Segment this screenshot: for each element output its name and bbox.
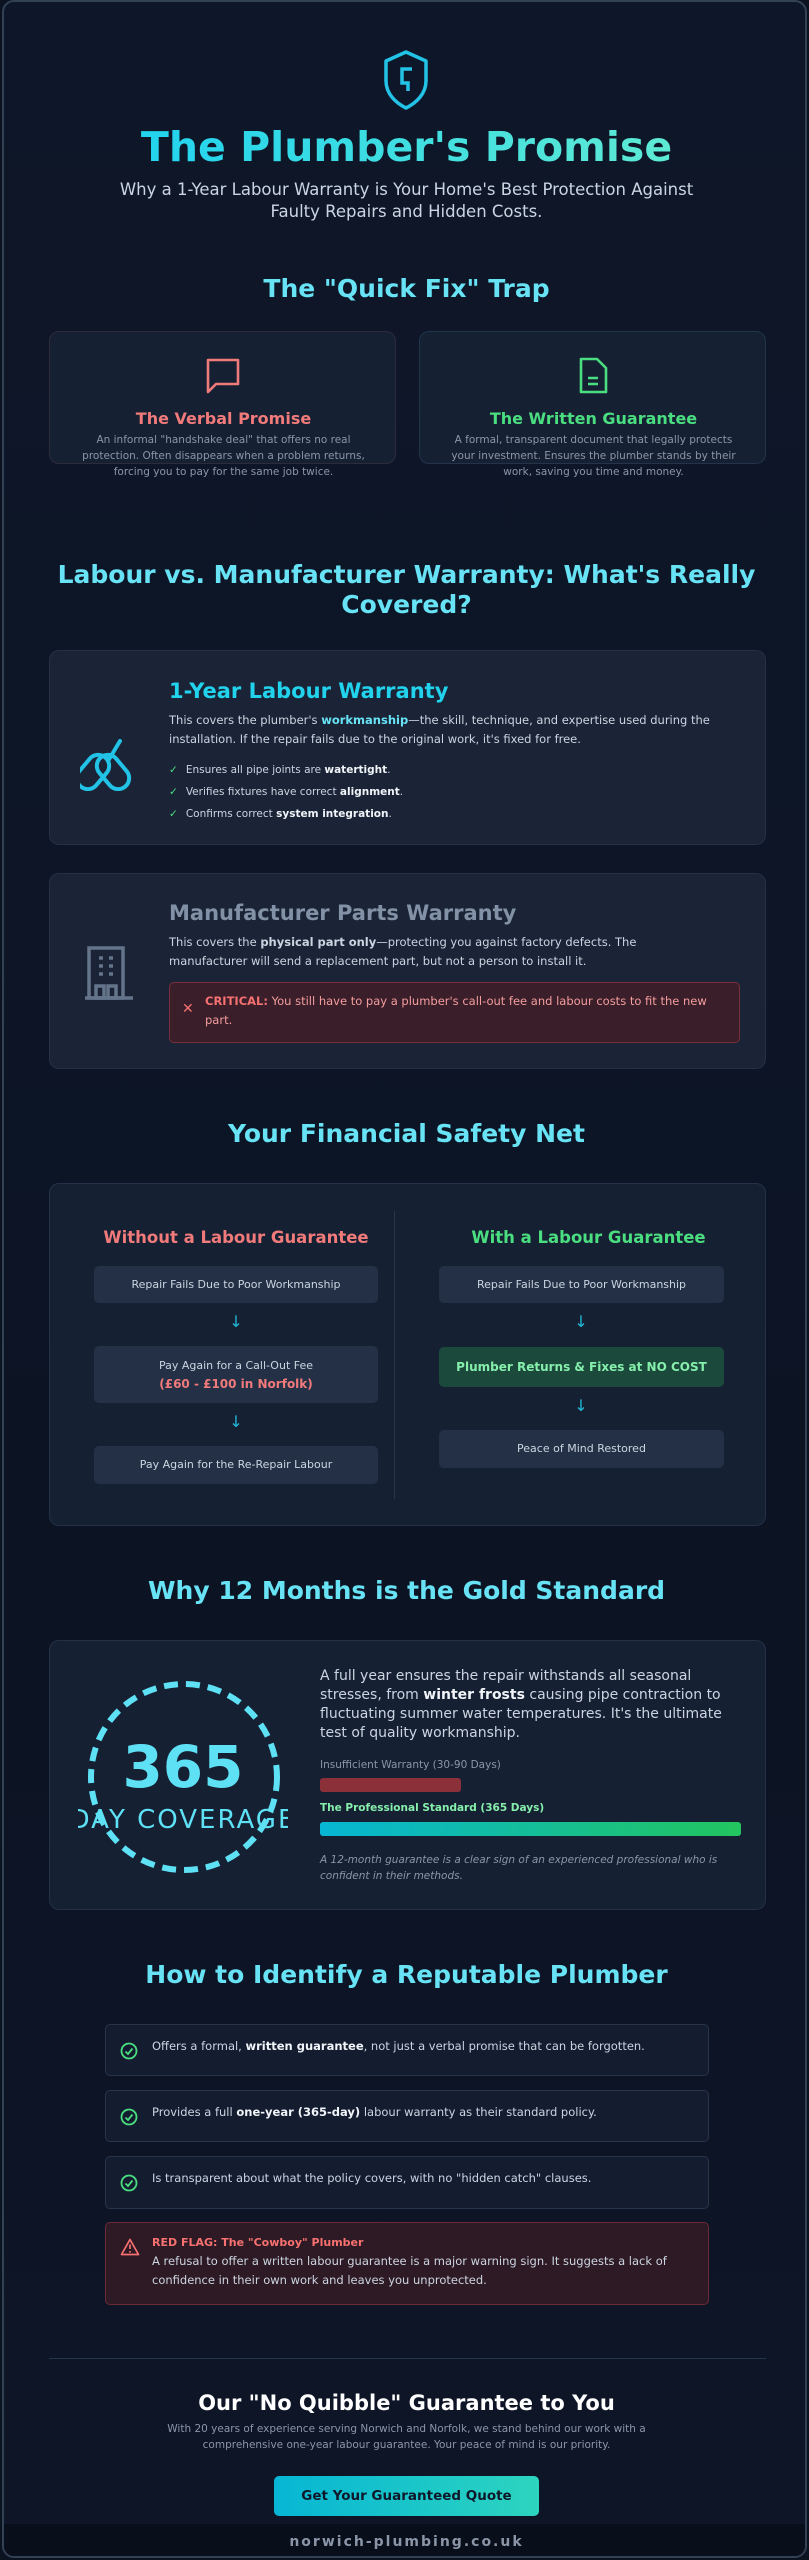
icon: building [85, 946, 133, 1000]
note: A 12-month guarantee is a clear sign of an experienced professional who is confident in their methods. [320, 1854, 717, 1882]
heading: reputable plumber: How to Identify a Reputable Plumber [145, 1960, 668, 1989]
checklist item 3 [105, 2156, 709, 2209]
button: get quote [274, 2476, 539, 2516]
column: without guarantee: Pay Again for the Re-Repair Labour [140, 1458, 332, 1471]
card title: The Verbal Promise [136, 409, 311, 428]
callout: critical [169, 982, 740, 1043]
column: without guarantee: Without a Labour Guarantee [103, 1228, 369, 1247]
heading: financial safety net: Your Financial Safety Net [228, 1119, 585, 1148]
icon: shield [384, 50, 428, 110]
bar chart [320, 1759, 741, 1836]
checklist: ✓ Confirms correct system integration. [169, 808, 392, 820]
checklist item 1: Offers a formal, written guarantee, not just a verbal promise that can be forgotten. [152, 2039, 645, 2053]
checklist: ✓ Ensures all pipe joints are watertight. [169, 764, 390, 776]
callout: red flag: RED FLAG: The "Cowboy" Plumber [152, 2236, 363, 2249]
column: without guarantee: (£60 - £100 in Norfolk) [159, 1376, 313, 1390]
icon: speech bubble [206, 358, 240, 394]
card text: This covers the plumber's workmanship—the skill, technique, and expertise used during the installation. If the repair fails due to the original work, it's fixed for free. [169, 713, 710, 746]
checklist item 3: Is transparent about what the policy covers, with no "hidden catch" clauses. [152, 2171, 591, 2185]
panel: financial comparison [49, 1183, 766, 1526]
card title: The Written Guarantee [490, 409, 697, 428]
card text: This covers the physical part only—protecting you against factory defects. The manufacturer will send a replacement part, but not a person to install it. [169, 935, 636, 968]
icon: document [580, 358, 608, 394]
icon: link [80, 739, 132, 791]
chart: 365 circle: 365 [122, 1733, 244, 1801]
column: without guarantee [94, 1228, 378, 1484]
column: with guarantee [439, 1228, 724, 1468]
chart: 365 circle [78, 1681, 288, 1873]
panel: verbal promise [49, 331, 396, 464]
text block: A full year ensures the repair withstands all seasonal stresses, from winter frosts causing pipe contraction to fluctuating summer water temperatures. It's the ultimate test of quality workmanship. [320, 1668, 722, 1741]
column: without guarantee: ↓ [229, 1412, 243, 1431]
column: without guarantee: Pay Again for a Call-Out Fee [159, 1358, 313, 1372]
title: The Plumber's Promise [141, 123, 672, 171]
panel: 365 day coverage [49, 1640, 766, 1910]
column: with guarantee: With a Labour Guarantee [471, 1228, 706, 1247]
column: with guarantee: Repair Fails Due to Poor Workmanship [477, 1278, 686, 1290]
card text: A formal, transparent document that legally protects your investment. Ensures the plumber stands by their work, saving you time and money. [451, 434, 736, 478]
column: without guarantee: Repair Fails Due to Poor Workmanship [131, 1278, 341, 1290]
column: without guarantee: ↓ [229, 1312, 243, 1331]
checklist: ✓ Verifies fixtures have correct alignment. [169, 786, 403, 798]
bar chart: Insufficient Warranty (30-90 Days) [320, 1759, 501, 1771]
card text: An informal "handshake deal" that offers no real protection. Often disappears when a problem returns, forcing you to pay for the same job twice. [82, 434, 365, 478]
checklist item 2: Provides a full one-year (365-day) labour warranty as their standard policy. [152, 2105, 597, 2119]
heading: quick fix trap: The "Quick Fix" Trap [263, 274, 550, 303]
card title: 1-Year Labour Warranty [169, 679, 448, 703]
checklist [169, 764, 403, 820]
callout: red flag [105, 2222, 709, 2305]
column: with guarantee: ↓ [574, 1312, 588, 1331]
text: guarantee description: With 20 years of experience serving Norwich and Norfolk, we stand behind our work with a comprehensive one-year labour guarantee. Your peace of mind is our priority. [167, 2423, 646, 2451]
button: get quote: Get Your Guaranteed Quote [301, 2488, 512, 2504]
subtitle: Why a 1-Year Labour Warranty is Your Home's Best Protection Against Faulty Repairs and Hidden Costs. [120, 180, 693, 221]
callout: critical: CRITICAL: You still have to pay a plumber's call-out fee and labour costs to fit the new part. [205, 994, 707, 1027]
column: with guarantee: Plumber Returns & Fixes at NO COST [456, 1360, 707, 1374]
panel: labour warranty [49, 650, 766, 845]
footer: norwich-plumbing.co.uk [289, 2534, 524, 2550]
panel: manufacturer warranty [49, 873, 766, 1069]
bar chart: The Professional Standard (365 Days) [320, 1802, 544, 1814]
callout: red flag: A refusal to offer a written labour guarantee is a major warning sign. It suggests a lack of confidence in their own work and leaves you unprotected. [152, 2254, 667, 2287]
column: with guarantee: ↓ [574, 1396, 588, 1415]
checklist item 1 [105, 2024, 709, 2076]
chart: 365 circle: DAY COVERAGE [70, 1805, 296, 1835]
card title: Manufacturer Parts Warranty [169, 901, 516, 925]
checklist item 2 [105, 2090, 709, 2142]
panel: written guarantee [419, 331, 766, 464]
column: with guarantee: Peace of Mind Restored [517, 1442, 646, 1455]
heading: no quibble guarantee: Our "No Quibble" Guarantee to You [198, 2391, 615, 2415]
heading: why 12 months: Why 12 Months is the Gold Standard [148, 1576, 665, 1605]
heading: labour vs manufacturer: Labour vs. Manufacturer Warranty: What's Really Covered? [58, 560, 755, 619]
footer [4, 2524, 809, 2560]
callout: critical: ✕ [182, 1001, 194, 1017]
